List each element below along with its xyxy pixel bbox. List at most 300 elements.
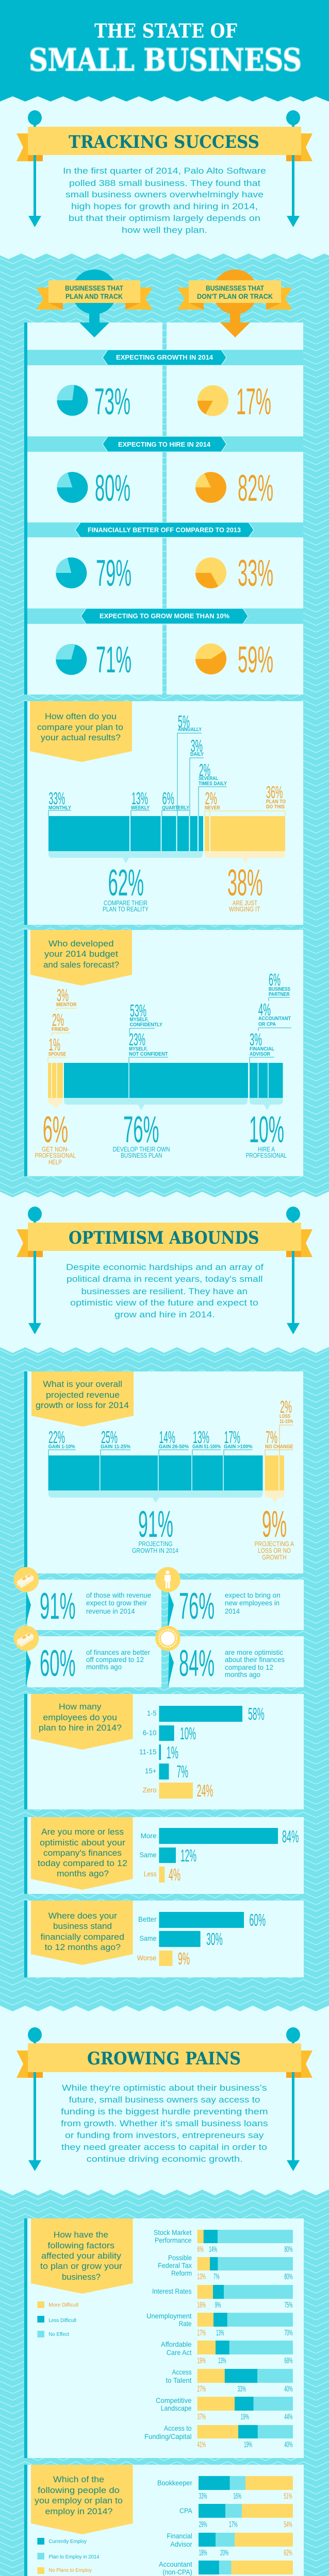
stacked bars: factors: Competitive bbox=[156, 2396, 192, 2404]
question box: financial standing: financially compared bbox=[40, 1932, 124, 1942]
stat card: 84 percent optimistic bbox=[168, 1636, 304, 1687]
bar chart: optimistic: More bbox=[141, 1832, 157, 1840]
question box: factors: business? bbox=[62, 2272, 101, 2282]
bar callouts: who developed labels: 3% bbox=[57, 986, 69, 1005]
stacked bars: factors: Funding/Capital bbox=[144, 2432, 192, 2441]
pie: 71 percent bbox=[56, 639, 131, 681]
question box: compare plan: your actual results? bbox=[41, 733, 121, 742]
bar callouts: who developed labels: MYSELF, bbox=[129, 1046, 147, 1052]
section banner: tracking success: TRACKING SUCCESS bbox=[69, 132, 259, 152]
stacked bars: factors: Care Act bbox=[167, 2348, 192, 2357]
question box: optimistic: today compared to 12 bbox=[38, 1858, 127, 1868]
pie: 17 percent bbox=[198, 381, 271, 422]
bar callouts: revenue labels: LOSS bbox=[279, 1414, 290, 1419]
stacked bars: people employed: (non-CPA) bbox=[162, 2568, 192, 2576]
stat: 91 percent projecting growth: PROJECTING bbox=[139, 1540, 173, 1548]
column header: businesses that do not plan or track: BUSINESSES THAT bbox=[206, 284, 264, 292]
stat: 6 percent non-professional: GET NON- bbox=[42, 1145, 69, 1153]
stacked bars: factors: Affordable bbox=[161, 2340, 192, 2348]
panel: factors affecting growth bbox=[24, 2218, 304, 2458]
legend: people employed: No Plans to Employ bbox=[48, 2568, 92, 2573]
stat card: 76 percent new employees: new employees in bbox=[225, 1599, 279, 1607]
bar callouts: revenue labels: 11-15% bbox=[279, 1419, 293, 1425]
stacked bars: factors: Rate bbox=[179, 2319, 192, 2328]
stat: 62 percent compare bbox=[103, 862, 149, 913]
stacked bars: factors: Access bbox=[172, 2368, 192, 2376]
stat: 6 percent non-professional: 6% bbox=[43, 1109, 68, 1150]
stacked bars: factors: 19% bbox=[244, 2441, 252, 2449]
stat: 10 percent hire a professional: 10% bbox=[249, 1109, 284, 1150]
panel: how many employees bbox=[24, 1694, 304, 1809]
stat card: 60 percent finances bbox=[26, 1636, 161, 1687]
question box: how many employees: plan to hire in 2014? bbox=[39, 1723, 122, 1733]
stat: 9 percent projecting loss bbox=[255, 1504, 294, 1561]
stat: 38 percent winging it bbox=[227, 862, 263, 913]
question box: optimistic bbox=[31, 1817, 133, 1890]
chevron band: section 3 bbox=[0, 2190, 329, 2576]
section banner: optimism abounds: OPTIMISM ABOUNDS bbox=[69, 1228, 259, 1248]
chevron band: section 2 bbox=[0, 1347, 329, 2011]
question box: projected revenue: What is your overall bbox=[43, 1379, 122, 1389]
bar callouts: revenue labels: 2% bbox=[280, 1397, 292, 1416]
question box: how many employees: employees do you bbox=[43, 1713, 117, 1722]
stacked bars: people employed bbox=[157, 2476, 293, 2576]
intro paragraph: growing pains: from growth. Whether it's small business loans bbox=[61, 2119, 268, 2128]
bar callouts: who developed labels: 53% bbox=[130, 1001, 146, 1020]
bar callouts: who developed labels: MYSELF, bbox=[130, 1017, 149, 1023]
bar callouts: who developed labels: 23% bbox=[129, 1030, 145, 1049]
question box: who developed: and sales forecast? bbox=[43, 960, 119, 970]
text: 80% bbox=[95, 468, 130, 509]
text: 73% bbox=[94, 381, 130, 422]
bar callouts: revenue labels: NO CHANGE bbox=[265, 1444, 293, 1450]
bar callouts: compare frequency labels: TIMES DAILY bbox=[199, 781, 227, 787]
question box: projected revenue: projected revenue bbox=[46, 1390, 120, 1400]
question box: optimistic: months ago? bbox=[57, 1869, 109, 1878]
column header: businesses that plan and track: BUSINESSES THAT bbox=[65, 284, 123, 292]
bar chart: optimistic: Same bbox=[140, 1851, 157, 1859]
bar callouts: who developed labels: ADVISOR bbox=[250, 1052, 271, 1057]
stacked bars: factors: 9% bbox=[215, 2301, 221, 2310]
row label: expecting to grow more than ten percent: EXPECTING TO GROW MORE THAN 10% bbox=[100, 612, 229, 620]
stacked bars: factors: 44% bbox=[284, 2413, 293, 2421]
legend: people employed bbox=[37, 2538, 100, 2574]
stat card: 84 percent optimistic: are more optimistic bbox=[225, 1648, 283, 1656]
question box: financial standing bbox=[31, 1901, 133, 1965]
bar callouts: who developed labels: 3% bbox=[250, 1030, 262, 1049]
intro paragraph: optimism abounds bbox=[66, 1262, 264, 1319]
stat card: 84 percent optimistic: about their finances bbox=[225, 1655, 285, 1664]
bar chart: employees bbox=[139, 1704, 265, 1800]
stacked bars: factors bbox=[144, 2228, 293, 2449]
column header: businesses that plan and track: PLAN AND TRACK bbox=[65, 292, 123, 300]
stacked bars: factors: to Talent bbox=[166, 2376, 192, 2384]
question box: people employed: employ in 2014? bbox=[45, 2506, 112, 2516]
bar callouts: revenue labels: GAIN 11-25% bbox=[101, 1444, 130, 1450]
question box: who developed: Who developed bbox=[48, 939, 113, 948]
stacked bars: factors: 13% bbox=[197, 2273, 206, 2281]
bar callouts: revenue labels bbox=[48, 1397, 293, 1455]
question box: factors bbox=[31, 2218, 133, 2294]
bar callouts: compare frequency labels: 5% bbox=[178, 712, 190, 731]
row label: expecting to hire: EXPECTING TO HIRE IN 2014 bbox=[118, 440, 211, 448]
stacked bars: factors: Interest Rates bbox=[152, 2287, 192, 2295]
question box: projected revenue: growth or loss for 2014 bbox=[36, 1400, 129, 1410]
stat: 62 percent compare: PLAN TO REALITY bbox=[103, 905, 149, 913]
intro paragraph: tracking success: polled 388 small business. They found that bbox=[69, 178, 260, 188]
question box: optimistic: company's finances bbox=[43, 1848, 122, 1858]
bar chart: employees: 7% bbox=[177, 1762, 188, 1781]
pie: 80 percent bbox=[57, 468, 130, 509]
stacked bars: people employed: 18% bbox=[199, 2549, 207, 2557]
bar callouts: who developed labels: 6% bbox=[269, 970, 281, 989]
stat card: 91 percent revenue: of those with revenue bbox=[86, 1591, 151, 1599]
stacked bars: factors: 19% bbox=[197, 2357, 206, 2365]
legend: people employed: Currently Employ bbox=[48, 2539, 87, 2545]
stacked bars: people employed: 29% bbox=[199, 2520, 207, 2529]
icon: person bbox=[155, 1567, 180, 1592]
stacked bars: people employed: 20% bbox=[220, 2549, 229, 2557]
bar callouts: compare frequency labels: NEVER bbox=[205, 805, 220, 811]
question box: who developed: your 2014 budget bbox=[44, 949, 118, 959]
stacked bars: factors: 80% bbox=[284, 2245, 293, 2254]
stacked bars: factors: 7% bbox=[213, 2273, 220, 2281]
text: 79% bbox=[96, 553, 131, 594]
bar callouts: who developed labels: CONFIDENTLY bbox=[130, 1022, 162, 1028]
intro paragraph: optimism abounds: grow and hire in 2014. bbox=[114, 1310, 215, 1319]
row label: expecting growth: EXPECTING GROWTH IN 2014 bbox=[116, 353, 213, 361]
row label: expecting to grow more than ten percent bbox=[81, 608, 248, 624]
bar callouts: compare frequency labels: 36% bbox=[266, 783, 283, 802]
stacked bars: factors: 68% bbox=[284, 2357, 293, 2365]
question box: people employed: you employ or plan to bbox=[35, 2496, 123, 2505]
question box: factors: to plan or grow your bbox=[40, 2261, 122, 2271]
stat: 9 percent projecting loss: PROJECTING A bbox=[255, 1540, 294, 1548]
bar chart: optimistic: 4% bbox=[169, 1865, 180, 1884]
panel: more or less optimistic bbox=[24, 1817, 304, 1894]
chevron band: section 1 bbox=[0, 253, 329, 1197]
stacked bars: factors: 16% bbox=[197, 2301, 206, 2310]
question box: financial standing: Where does your bbox=[48, 1911, 117, 1921]
question box: factors: How have the bbox=[54, 2230, 108, 2240]
pie: 82 percent bbox=[195, 468, 273, 509]
row label: expecting to hire bbox=[103, 436, 226, 452]
bar callouts: revenue labels: GAIN >100% bbox=[224, 1444, 253, 1450]
panel: more or less optimistic: 84% bbox=[282, 1827, 299, 1846]
stat card: 60 percent finances: of finances are better bbox=[86, 1648, 150, 1656]
stat card: 60 percent finances: 60% bbox=[40, 1643, 75, 1684]
title line: the state of: THE STATE OF bbox=[94, 20, 237, 42]
bar callouts: revenue labels: 13% bbox=[193, 1428, 209, 1447]
question box: projected revenue bbox=[31, 1371, 134, 1427]
stat card: 91 percent revenue: revenue in 2014 bbox=[86, 1607, 135, 1615]
bar callouts: compare frequency labels: 3% bbox=[191, 736, 203, 755]
bar chart: financial standing: Worse bbox=[137, 1954, 157, 1962]
stacked bars: factors: 14% bbox=[209, 2245, 217, 2254]
section banner: optimism abounds bbox=[17, 1207, 312, 1334]
bar chart: financial standing: 9% bbox=[178, 1949, 190, 1968]
stacked bars: factors: 27% bbox=[197, 2385, 206, 2394]
stacked bars: factors: Performance bbox=[155, 2236, 192, 2244]
stat card: 91 percent revenue bbox=[26, 1580, 161, 1630]
stat: 62 percent compare: 62% bbox=[108, 862, 144, 904]
question box: factors: following factors bbox=[47, 2241, 114, 2250]
bar callouts: who developed labels: 1% bbox=[48, 1035, 60, 1054]
stat card: 60 percent finances: months ago bbox=[86, 1663, 122, 1671]
stat card: 84 percent optimistic: 84% bbox=[179, 1643, 215, 1684]
bar chart: financial standing: 30% bbox=[206, 1929, 223, 1948]
stat card: 91 percent revenue: 91% bbox=[40, 1586, 75, 1627]
question box: compare plan bbox=[30, 701, 132, 762]
stacked bars: factors: 17% bbox=[197, 2329, 206, 2337]
section banner: tracking success bbox=[17, 110, 312, 227]
bar callouts: compare frequency labels: PLAN TO bbox=[266, 799, 286, 805]
legend: factors: No Effect bbox=[48, 2332, 69, 2337]
panel: where does your business stand bbox=[24, 1901, 304, 1977]
stacked bars: people employed: 62% bbox=[284, 2549, 292, 2557]
bar callouts: revenue labels: 7% bbox=[266, 1428, 277, 1447]
row label: financially better off: FINANCIALLY BETTER OFF COMPARED TO 2013 bbox=[88, 526, 241, 534]
question box: compare plan: How often do you bbox=[45, 711, 117, 721]
question box: how many employees bbox=[31, 1694, 133, 1750]
legend: people employed: Plan to Employ in 2014 bbox=[48, 2554, 100, 2560]
panel: plan vs no plan comparison bbox=[24, 323, 303, 694]
bar callouts: who developed labels: 4% bbox=[258, 1000, 271, 1019]
bar callouts: compare frequency labels: 6% bbox=[162, 789, 174, 808]
stacked bars: people employed: 16% bbox=[233, 2492, 241, 2501]
intro paragraph: growing pains: future, small business owners say access to bbox=[69, 2095, 260, 2105]
intro paragraph: growing pains bbox=[61, 2083, 268, 2164]
intro paragraph: tracking success: small business owners overwhelmingly have bbox=[65, 190, 264, 199]
stacked bar: plan comparison frequency bbox=[48, 816, 285, 863]
question box: compare plan: compare your plan to bbox=[37, 722, 123, 732]
stacked bars: factors: 80% bbox=[284, 2273, 293, 2281]
stacked bars: factors: Stock Market bbox=[154, 2228, 192, 2236]
legend: factors: Less Difficult bbox=[48, 2318, 76, 2324]
stat: 9 percent projecting loss: LOSS OR NO bbox=[258, 1547, 291, 1554]
stat card: 84 percent optimistic: compared to 12 bbox=[225, 1663, 273, 1671]
intro paragraph: optimism abounds: Despite economic hardships and an array of bbox=[66, 1262, 264, 1272]
bar callouts: compare frequency labels: DAILY bbox=[190, 752, 204, 757]
bar callouts: who developed labels: ACCOUNTANT bbox=[258, 1016, 291, 1022]
stat: 38 percent winging it: ARE JUST bbox=[233, 899, 257, 907]
bar callouts: revenue labels: GAIN 26-50% bbox=[159, 1444, 189, 1450]
intro paragraph: growing pains: they need greater access to capital in order to bbox=[61, 2142, 267, 2152]
stacked bars: factors: 6% bbox=[197, 2245, 204, 2254]
bar callouts: compare frequency labels: MONTHLY bbox=[48, 805, 71, 811]
bar callouts: who developed labels: NOT CONFIDENT bbox=[129, 1052, 168, 1057]
stacked bars: factors: 40% bbox=[284, 2441, 293, 2449]
bar callouts: revenue labels: 25% bbox=[101, 1428, 118, 1447]
intro paragraph: growing pains: funding is the biggest hurdle preventing them bbox=[61, 2107, 268, 2116]
bar callouts: compare frequency labels: WEEKLY bbox=[131, 805, 150, 811]
stacked bars: factors: 19% bbox=[241, 2413, 249, 2421]
intro paragraph: optimism abounds: optimistic view of the future and expect to bbox=[70, 1298, 258, 1308]
stacked bar: projected revenue bbox=[48, 1455, 284, 1503]
bar callouts: who developed labels: SPOUSE bbox=[48, 1052, 66, 1057]
pie: 73 percent bbox=[57, 381, 130, 422]
header: title block bbox=[0, 0, 329, 101]
question box: factors: affected your ability bbox=[41, 2251, 122, 2261]
bar chart: financial standing: Better bbox=[138, 1915, 157, 1923]
bar callouts: compare frequency labels bbox=[48, 712, 286, 816]
text: 17% bbox=[236, 381, 271, 422]
bar callouts: revenue labels: 22% bbox=[48, 1428, 65, 1447]
bar callouts: who developed labels: FRIEND bbox=[52, 1027, 69, 1032]
pie: 79 percent bbox=[56, 553, 131, 594]
bar chart: employees: 1% bbox=[167, 1743, 178, 1762]
stacked bars: people employed: 33% bbox=[199, 2492, 207, 2501]
stacked bars: factors: 40% bbox=[284, 2385, 293, 2394]
stacked bars: people employed: CPA bbox=[179, 2506, 192, 2515]
intro paragraph: tracking success: but that their optimism largely depends on bbox=[69, 213, 260, 223]
bar chart: employees: 6-10 bbox=[143, 1728, 157, 1737]
stacked bars: factors: 33% bbox=[238, 2385, 246, 2394]
stacked bars: people employed: Advisor bbox=[170, 2540, 192, 2548]
stacked bars: people employed: Bookkeeper bbox=[157, 2479, 192, 2487]
column header: businesses that do not plan or track: DON'T PLAN OR TRACK bbox=[197, 292, 273, 300]
panel: projected revenue growth or loss bbox=[24, 1371, 303, 1573]
intro paragraph: tracking success bbox=[63, 166, 266, 235]
stacked bars: factors: 70% bbox=[284, 2329, 293, 2337]
bar callouts: who developed labels: FINANCIAL bbox=[250, 1046, 274, 1052]
question box: people employed: Which of the bbox=[53, 2475, 104, 2484]
section banner: growing pains bbox=[17, 2027, 312, 2171]
question box: optimistic: Are you more or less bbox=[41, 1827, 124, 1837]
question box: people employed: following people do bbox=[38, 2485, 120, 2495]
bar chart: employees: 11-15 bbox=[139, 1748, 157, 1756]
icon: cash stack bbox=[14, 1626, 39, 1651]
stat: 62 percent compare: COMPARE THEIR bbox=[104, 899, 147, 907]
stat: 76 percent develop own: BUSINESS PLAN bbox=[121, 1151, 162, 1159]
icon: cash stack bbox=[14, 1567, 39, 1592]
bar chart: optimistic: Less bbox=[144, 1870, 157, 1878]
bar chart: financial standing bbox=[137, 1910, 266, 1968]
stacked bars: factors: 13% bbox=[218, 2357, 226, 2365]
stacked bars: factors: Unemployment bbox=[146, 2312, 192, 2320]
pie: 33 percent bbox=[195, 553, 273, 594]
intro paragraph: growing pains: continue driving economic growth. bbox=[87, 2154, 243, 2164]
stacked bar: who developed bbox=[48, 1063, 283, 1110]
bar callouts: who developed labels bbox=[48, 970, 291, 1063]
question box: financial standing: to 12 months ago? bbox=[45, 1942, 121, 1952]
intro paragraph: tracking success: In the first quarter of 2014, Palo Alto Software bbox=[63, 166, 266, 176]
stat: 76 percent develop own: DEVELOP THEIR OWN bbox=[112, 1145, 170, 1153]
bar callouts: compare frequency labels: DO THIS bbox=[266, 804, 285, 810]
row label: expecting growth bbox=[103, 350, 226, 365]
stacked bars: factors: 75% bbox=[284, 2301, 293, 2310]
panel: who developed budget bbox=[24, 930, 303, 1176]
bar callouts: compare frequency labels: ANNUALLY bbox=[178, 727, 202, 733]
section banner: growing pains: GROWING PAINS bbox=[87, 2048, 241, 2069]
bar callouts: revenue labels: GAIN 1-10% bbox=[48, 1444, 75, 1450]
stat card: 76 percent new employees: 76% bbox=[179, 1586, 215, 1627]
pie: 59 percent bbox=[195, 639, 273, 681]
panel: how many employees: 58% bbox=[248, 1704, 265, 1723]
bar callouts: compare frequency labels: QUARTERLY bbox=[162, 805, 189, 811]
stacked bars: people employed: Accountant bbox=[159, 2560, 192, 2568]
bar callouts: who developed labels: 2% bbox=[52, 1010, 64, 1029]
bar callouts: compare frequency labels: 2% bbox=[199, 760, 210, 779]
stat: 10 percent hire a professional: HIRE A bbox=[258, 1145, 275, 1153]
stat card: 91 percent revenue: expect to grow their bbox=[86, 1599, 147, 1607]
stat card: 76 percent new employees: 2014 bbox=[225, 1607, 240, 1615]
stacked bars: people employed: 17% bbox=[229, 2520, 238, 2529]
question box: who developed bbox=[30, 930, 132, 986]
bar callouts: who developed labels: BUSINESS bbox=[269, 987, 290, 992]
bar callouts: who developed labels: PARTNER bbox=[269, 992, 290, 997]
intro paragraph: optimism abounds: businesses are resilient. They have an bbox=[81, 1286, 248, 1296]
panel: people you employ bbox=[24, 2465, 304, 2576]
stat card: 76 percent new employees bbox=[168, 1580, 304, 1630]
stat: 91 percent projecting growth: 91% bbox=[138, 1504, 173, 1545]
bar callouts: revenue labels: 14% bbox=[159, 1428, 175, 1447]
bar chart: employees: 10% bbox=[180, 1724, 196, 1743]
stat: 6 percent non-professional: PROFESSIONAL bbox=[35, 1151, 76, 1159]
stat: 9 percent projecting loss: GROWTH bbox=[262, 1553, 287, 1561]
question box: how many employees: How many bbox=[59, 1702, 102, 1711]
question box: people employed bbox=[31, 2465, 133, 2534]
stat: 38 percent winging it: WINGING IT bbox=[229, 905, 260, 913]
text: 59% bbox=[238, 639, 273, 681]
stacked bars: factors: Access to bbox=[164, 2424, 192, 2432]
question box: optimistic: optimistic about your bbox=[40, 1838, 125, 1848]
panel: how often do you compare: 38% bbox=[227, 862, 263, 904]
text: 82% bbox=[238, 468, 273, 509]
bar chart: financial standing: Same bbox=[140, 1934, 157, 1942]
stat card: 60 percent finances: off compared to 12 bbox=[86, 1655, 144, 1664]
stacked bars: factors: Federal Tax bbox=[158, 2261, 192, 2269]
question box: financial standing: business stand bbox=[53, 1921, 112, 1931]
stacked bars: factors: 13% bbox=[216, 2329, 224, 2337]
column header: businesses that do not plan or track bbox=[177, 269, 292, 337]
intro paragraph: growing pains: While they're optimistic about their business's bbox=[62, 2083, 267, 2093]
bar callouts: compare frequency labels: 33% bbox=[48, 789, 65, 808]
bar callouts: compare frequency labels: 13% bbox=[131, 789, 148, 808]
stat: 76 percent develop own bbox=[112, 1109, 170, 1159]
stat: 6 percent non-professional bbox=[35, 1109, 76, 1166]
bar callouts: compare frequency labels: 2% bbox=[205, 789, 217, 808]
intro paragraph: optimism abounds: political drama in recent years, today's small bbox=[67, 1274, 263, 1284]
stacked bars: factors: Reform bbox=[171, 2269, 192, 2277]
stacked bars: factors: 37% bbox=[197, 2413, 206, 2421]
stacked bars: factors: 41% bbox=[197, 2441, 206, 2449]
bar chart: employees: 15+ bbox=[145, 1767, 157, 1775]
bar chart: optimistic bbox=[140, 1827, 299, 1884]
bar callouts: who developed labels: MENTOR bbox=[56, 1002, 77, 1008]
stat: 10 percent hire a professional bbox=[245, 1109, 287, 1159]
stat card: 76 percent new employees: expect to bring on bbox=[225, 1591, 281, 1599]
legend: factors: More Difficult bbox=[48, 2302, 79, 2308]
stat: 91 percent projecting growth: GROWTH IN 2014 bbox=[132, 1547, 178, 1554]
stacked bars: people employed: 54% bbox=[284, 2520, 292, 2529]
bar chart: employees: 1-5 bbox=[147, 1709, 157, 1717]
bar chart: employees: 24% bbox=[197, 1781, 213, 1800]
stat: 76 percent develop own: 76% bbox=[123, 1109, 159, 1150]
intro paragraph: tracking success: high hopes for growth and hiring in 2014, bbox=[71, 201, 258, 211]
intro paragraph: tracking success: how well they plan. bbox=[122, 225, 207, 235]
panel: where does your business stand: 60% bbox=[249, 1910, 266, 1929]
stat: 91 percent projecting growth bbox=[132, 1504, 178, 1554]
bar callouts: revenue labels: 17% bbox=[224, 1428, 240, 1447]
stacked bars: factors: Landscape bbox=[161, 2404, 192, 2412]
stat: 9 percent projecting loss: 9% bbox=[262, 1504, 287, 1545]
stat card: 84 percent optimistic: months ago bbox=[225, 1670, 260, 1679]
bar chart: optimistic: 12% bbox=[180, 1846, 196, 1865]
stat: 6 percent non-professional: HELP bbox=[48, 1158, 62, 1166]
stacked bars: factors: Possible bbox=[168, 2253, 192, 2262]
legend: factors bbox=[37, 2301, 79, 2337]
